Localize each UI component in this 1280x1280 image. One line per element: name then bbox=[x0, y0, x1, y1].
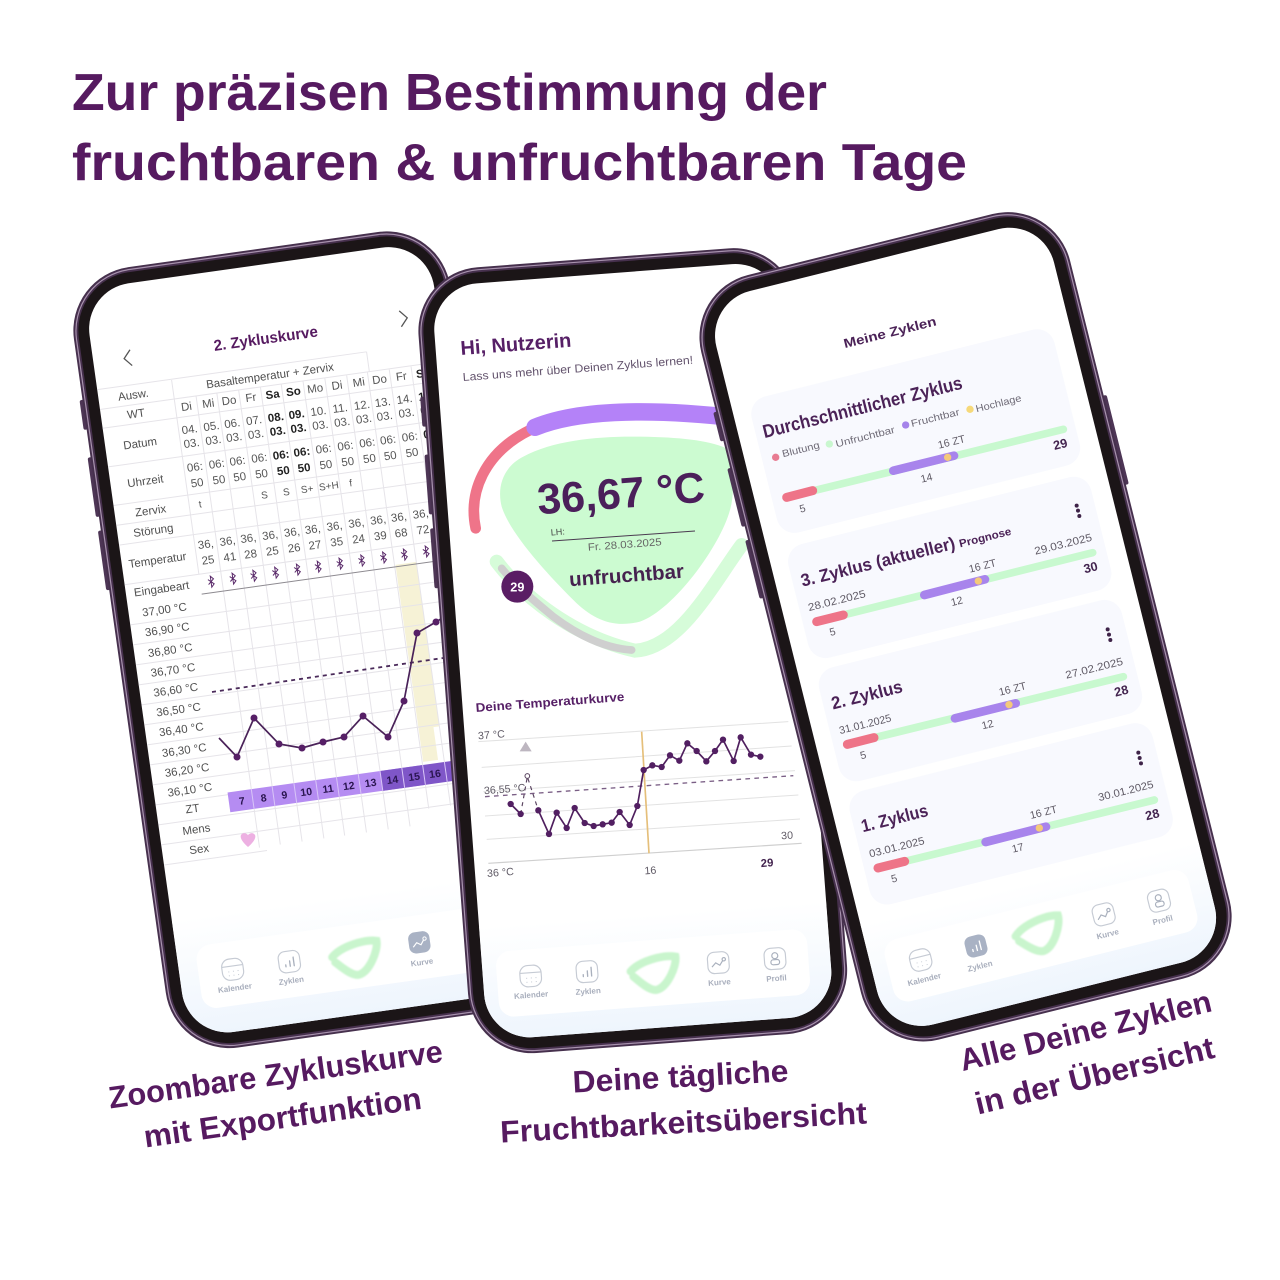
navigation items middle: Profil bbox=[766, 973, 787, 984]
table values: 03. bbox=[290, 422, 307, 436]
table values: 11. bbox=[332, 402, 349, 416]
navigation items middle: Kurve bbox=[708, 977, 732, 988]
row labels: 36,50 °C bbox=[156, 701, 202, 720]
table values: 03. bbox=[247, 428, 265, 442]
table values: 36, bbox=[219, 535, 236, 549]
cycle cards background bbox=[747, 325, 1177, 908]
table values bbox=[182, 363, 430, 565]
table values: 14. bbox=[396, 393, 413, 407]
row labels: Temperatur bbox=[128, 551, 187, 571]
table values: 06: bbox=[379, 434, 397, 448]
card: second cycle: 16 ZT bbox=[998, 680, 1028, 699]
navigation items left: Kurve bbox=[410, 956, 434, 969]
card: third cycle: 28.02.2025 bbox=[807, 588, 867, 614]
table values: 06: bbox=[293, 446, 311, 460]
table values: S bbox=[261, 490, 269, 502]
temperature chart: 36,55 °C bbox=[484, 782, 526, 797]
table values: Sa bbox=[415, 367, 432, 381]
table values: 72 bbox=[416, 524, 430, 538]
table values: 09. bbox=[288, 408, 305, 422]
table values: 36, bbox=[326, 520, 343, 534]
table values: 50 bbox=[190, 477, 204, 490]
caption left: mit Exportfunktion bbox=[141, 1081, 424, 1154]
cycle day bar: 10 bbox=[300, 786, 313, 799]
table values: 50 bbox=[297, 462, 311, 475]
navigation bar left bbox=[172, 920, 469, 1032]
table values: Do bbox=[372, 373, 388, 387]
navigation items right: Profil bbox=[1152, 913, 1174, 927]
navigation items middle: Kalender bbox=[514, 989, 549, 1001]
table values: 03. bbox=[420, 404, 437, 418]
caption right: Alle Deine Zyklen bbox=[956, 984, 1215, 1078]
card: second cycle bbox=[829, 627, 1130, 762]
fertility blob bbox=[500, 437, 733, 624]
row labels: Eingabeart bbox=[133, 580, 191, 599]
table values: Mi bbox=[352, 376, 366, 390]
title bbox=[72, 64, 967, 192]
LH line bbox=[552, 531, 695, 541]
row labels: Uhrzeit bbox=[127, 473, 165, 490]
bleeding arc bbox=[474, 430, 530, 528]
table values: 03. bbox=[269, 425, 287, 439]
phone frame left bbox=[62, 223, 554, 1057]
card: first cycle: 1. Zyklus bbox=[859, 800, 930, 836]
table values: S bbox=[282, 487, 291, 499]
temperature curve bbox=[219, 612, 452, 760]
table values: 26 bbox=[287, 542, 301, 556]
table values: 50 bbox=[383, 450, 398, 463]
table values: 41 bbox=[223, 551, 237, 565]
bluetooth icons row bbox=[208, 545, 430, 588]
table values: 50 bbox=[405, 447, 419, 460]
table values: 04. bbox=[181, 423, 199, 437]
cycle day bar: 11 bbox=[322, 783, 335, 796]
caption middle: Fruchtbarkeitsübersicht bbox=[499, 1095, 868, 1150]
card: first cycle: 03.01.2025 bbox=[868, 835, 926, 860]
greeting: Hi, Nutzerin bbox=[460, 330, 572, 360]
phone: left, cycle curve bbox=[73, 231, 474, 1048]
table values: 03. bbox=[333, 416, 351, 430]
table values: Mo bbox=[307, 382, 324, 396]
cycle gauge bbox=[474, 412, 742, 651]
card: second cycle: 28 bbox=[1113, 683, 1130, 700]
table values: 03. bbox=[205, 434, 222, 448]
card: second cycle: 12 bbox=[980, 718, 995, 732]
table values: 06: bbox=[315, 443, 333, 457]
row labels: 36,40 °C bbox=[158, 721, 204, 739]
table values: 36, bbox=[304, 523, 322, 537]
table values: 36, bbox=[197, 538, 215, 552]
navigation items middle bbox=[514, 947, 787, 1001]
table values: 06: bbox=[229, 455, 246, 469]
fertile highlight band bbox=[396, 562, 439, 762]
table values: 03. bbox=[376, 410, 394, 424]
table values: 50 bbox=[341, 456, 355, 469]
table values: 03. bbox=[183, 437, 200, 451]
table values: 13. bbox=[374, 396, 392, 410]
row labels: 36,90 °C bbox=[144, 621, 190, 639]
table values: 25 bbox=[265, 545, 280, 559]
table values: 28 bbox=[244, 548, 258, 562]
navigation items right: Kurve bbox=[1096, 927, 1120, 941]
screen heading: Meine Zyklen bbox=[842, 314, 938, 351]
navigation items right: Kalender bbox=[907, 971, 942, 988]
card: second cycle: 2. Zyklus bbox=[829, 676, 905, 713]
temperature chart heading: Deine Temperaturkurve bbox=[475, 690, 625, 715]
navigation items right bbox=[907, 888, 1174, 988]
cycle day bar: 12 bbox=[342, 780, 356, 793]
card: first cycle: 17 bbox=[1011, 841, 1025, 856]
temperature chart: 29 bbox=[760, 857, 774, 870]
card: second cycle: 31.01.2025 bbox=[838, 712, 893, 737]
navigation items middle: Zyklen bbox=[575, 986, 601, 997]
cycle day bar bbox=[228, 761, 452, 812]
table values: 50 bbox=[362, 453, 377, 466]
table values: So bbox=[285, 385, 302, 399]
cycle day bar: 7 bbox=[238, 795, 246, 808]
card: third cycle: 30 bbox=[1082, 559, 1099, 576]
phone frame middle bbox=[411, 243, 855, 1058]
table values: S+ bbox=[300, 484, 314, 496]
row labels: WT bbox=[126, 407, 146, 422]
card: second cycle: 5 bbox=[859, 749, 868, 762]
table values: 03. bbox=[312, 419, 329, 433]
navigation bar right bbox=[861, 841, 1226, 1037]
card: third cycle: 5 bbox=[828, 626, 837, 639]
navigation items left: Zyklen bbox=[278, 975, 305, 987]
table values: 06: bbox=[359, 437, 376, 451]
row labels: 37,00 °C bbox=[142, 601, 188, 620]
table values: S+H bbox=[318, 480, 340, 494]
threshold line bbox=[212, 657, 450, 692]
navigation bar middle bbox=[479, 901, 835, 1042]
table values: 12. bbox=[353, 399, 371, 413]
table values: 03. bbox=[398, 407, 415, 421]
row labels: 36,80 °C bbox=[147, 642, 193, 660]
caption left bbox=[106, 1034, 445, 1154]
card: first cycle: 5 bbox=[890, 873, 899, 886]
cycle day bar: 8 bbox=[260, 792, 268, 805]
temperature chart: 30 bbox=[781, 830, 794, 842]
icon: heart bbox=[241, 833, 255, 847]
table values: Fr bbox=[245, 392, 257, 405]
table values: Mi bbox=[201, 398, 215, 411]
table values: 36, bbox=[412, 508, 430, 522]
fertile arc bbox=[535, 412, 740, 427]
table values: 36, bbox=[262, 529, 279, 543]
greeting subtitle: Lass uns mehr über Deinen Zyklus lernen! bbox=[462, 355, 694, 384]
table values: 35 bbox=[330, 536, 344, 550]
row labels: Datum bbox=[123, 436, 158, 453]
card: average cycle: Durchschnittlicher Zyklus bbox=[760, 372, 964, 442]
card: third cycle: 12 bbox=[950, 594, 964, 609]
phone frame right bbox=[683, 198, 1248, 1056]
card: third cycle: 29.03.2025 bbox=[1033, 532, 1093, 558]
navigation items left bbox=[217, 930, 434, 995]
navigation items left: Kalender bbox=[217, 981, 253, 995]
cycle day bar: 15 bbox=[408, 771, 421, 784]
table values: 06. bbox=[224, 417, 241, 431]
phone: right, cycle overview bbox=[683, 198, 1248, 1056]
table values: 25 bbox=[201, 554, 215, 568]
table values: 36, bbox=[390, 511, 408, 525]
day badge: 29 bbox=[510, 580, 524, 594]
phone: middle, daily overview bbox=[411, 243, 855, 1058]
cycle day bar: 16 bbox=[428, 768, 442, 781]
row labels: Zervix bbox=[134, 503, 167, 520]
grey arc bbox=[502, 568, 632, 650]
table values: 36, bbox=[283, 526, 301, 540]
table grid bbox=[97, 352, 454, 866]
table values: 36, bbox=[369, 514, 387, 528]
caption right: in der Übersicht bbox=[971, 1030, 1218, 1121]
card: average cycle: 5 bbox=[798, 503, 807, 516]
outer ring bbox=[497, 545, 742, 651]
table values: 50 bbox=[233, 471, 247, 485]
table values: Fr bbox=[395, 370, 408, 384]
forward arrow bbox=[399, 310, 408, 327]
row labels: Ausw. bbox=[117, 388, 149, 404]
card: first cycle bbox=[859, 751, 1161, 886]
row labels: 36,60 °C bbox=[153, 682, 199, 700]
cycle chart table bbox=[97, 310, 454, 866]
table values: 50 bbox=[427, 444, 441, 457]
table values: 36, bbox=[240, 532, 257, 546]
table values: 50 bbox=[254, 468, 269, 481]
row labels: ZT bbox=[185, 803, 200, 816]
caption middle bbox=[499, 1053, 868, 1150]
table values: 06: bbox=[251, 452, 268, 466]
table values: 03. bbox=[355, 413, 373, 427]
table values: 06: bbox=[337, 440, 354, 454]
card: third cycle bbox=[799, 504, 1099, 639]
card: third cycle: Prognose bbox=[958, 526, 1013, 550]
title: Zur präzisen Bestimmung der bbox=[72, 64, 827, 122]
table values: 03. bbox=[226, 431, 243, 445]
table values: 06: bbox=[186, 461, 204, 475]
card: average cycle: 29 bbox=[1052, 436, 1069, 453]
table values: 10. bbox=[310, 405, 327, 419]
row labels: 36,30 °C bbox=[161, 742, 207, 760]
screen content left bbox=[97, 310, 469, 1032]
table values: 06: bbox=[423, 427, 441, 442]
table values: 15. bbox=[418, 390, 435, 404]
card: average cycle: Blutung bbox=[781, 440, 821, 460]
card: second cycle: 27.02.2025 bbox=[1064, 656, 1124, 682]
cards text and bars upper bbox=[760, 314, 1099, 639]
table values: 36, bbox=[434, 505, 451, 519]
table values: Basaltemperatur + Zervix bbox=[205, 362, 335, 391]
icon: warning triangle bbox=[520, 742, 532, 751]
table values: 50 bbox=[276, 465, 291, 478]
table values: 50 bbox=[319, 459, 333, 472]
card: third cycle: 3. Zyklus (aktueller) bbox=[799, 533, 957, 591]
row labels bbox=[118, 390, 212, 854]
table values: 06: bbox=[272, 449, 290, 463]
screen content middle bbox=[460, 330, 835, 1042]
navigation items right: Zyklen bbox=[967, 959, 994, 974]
caption middle: Deine tägliche bbox=[572, 1053, 789, 1100]
table values: 68 bbox=[394, 527, 408, 541]
row labels: Störung bbox=[133, 522, 174, 540]
cards text and bars lower bbox=[829, 627, 1161, 886]
card: average cycle: 16 ZT bbox=[937, 433, 967, 452]
table values: Di bbox=[180, 401, 193, 414]
table values: Di bbox=[331, 380, 343, 393]
cycle day bar: 9 bbox=[281, 789, 288, 802]
screen content right bbox=[747, 314, 1226, 1037]
cycle day bar: 13 bbox=[364, 777, 377, 790]
table values: 50 bbox=[212, 474, 226, 487]
chart title: 2. Zykluskurve bbox=[213, 323, 319, 355]
table values: 07. bbox=[245, 414, 263, 428]
table values: t bbox=[198, 499, 203, 511]
cycle day bar: 14 bbox=[386, 774, 399, 787]
table values: 06: bbox=[208, 458, 226, 472]
table values: 39 bbox=[373, 530, 388, 544]
card: first cycle: 16 ZT bbox=[1029, 803, 1059, 822]
row labels: 36,70 °C bbox=[150, 662, 196, 680]
table values: 36, bbox=[348, 517, 365, 531]
table values: 08. bbox=[267, 411, 285, 425]
row labels: 36,20 °C bbox=[164, 762, 210, 780]
table values: 05. bbox=[203, 420, 220, 434]
table values: 27 bbox=[308, 539, 322, 553]
LH label: LH: bbox=[550, 526, 565, 538]
table values: 70 bbox=[438, 521, 452, 534]
table values: f bbox=[349, 478, 353, 489]
day badge bbox=[501, 571, 533, 603]
card: first cycle: 28 bbox=[1144, 806, 1161, 823]
table values: 06: bbox=[401, 431, 419, 445]
date: Fr. 28.03.2025 bbox=[587, 536, 662, 554]
card: average cycle: Fruchtbar bbox=[910, 407, 962, 430]
caption right bbox=[956, 984, 1218, 1121]
title: fruchtbaren & unfruchtbaren Tage bbox=[72, 134, 967, 192]
status label: unfruchtbar bbox=[568, 561, 685, 591]
card: average cycle: Unfruchtbar bbox=[835, 425, 897, 450]
table values: Do bbox=[221, 394, 237, 408]
card: first cycle: 30.01.2025 bbox=[1097, 779, 1155, 804]
temperature chart: 16 bbox=[644, 865, 657, 877]
row labels: Mens bbox=[182, 822, 211, 838]
temperature chart: 36 °C bbox=[487, 866, 515, 880]
table values: Sa bbox=[265, 388, 281, 402]
card: third cycle: 16 ZT bbox=[968, 557, 998, 576]
card: average cycle: Hochlage bbox=[975, 393, 1023, 415]
row labels: Sex bbox=[189, 843, 210, 857]
back arrow bbox=[123, 350, 132, 367]
temperature chart bbox=[478, 722, 802, 880]
card: average cycle: 14 bbox=[919, 471, 934, 486]
temperature chart: 37 °C bbox=[478, 728, 506, 742]
caption left: Zoombare Zykluskurve bbox=[106, 1034, 445, 1115]
row labels: 36,10 °C bbox=[167, 782, 213, 800]
temperature reading: 36,67 °C bbox=[535, 464, 706, 524]
table values: 24 bbox=[351, 533, 366, 547]
card: average cycle bbox=[760, 372, 1069, 516]
